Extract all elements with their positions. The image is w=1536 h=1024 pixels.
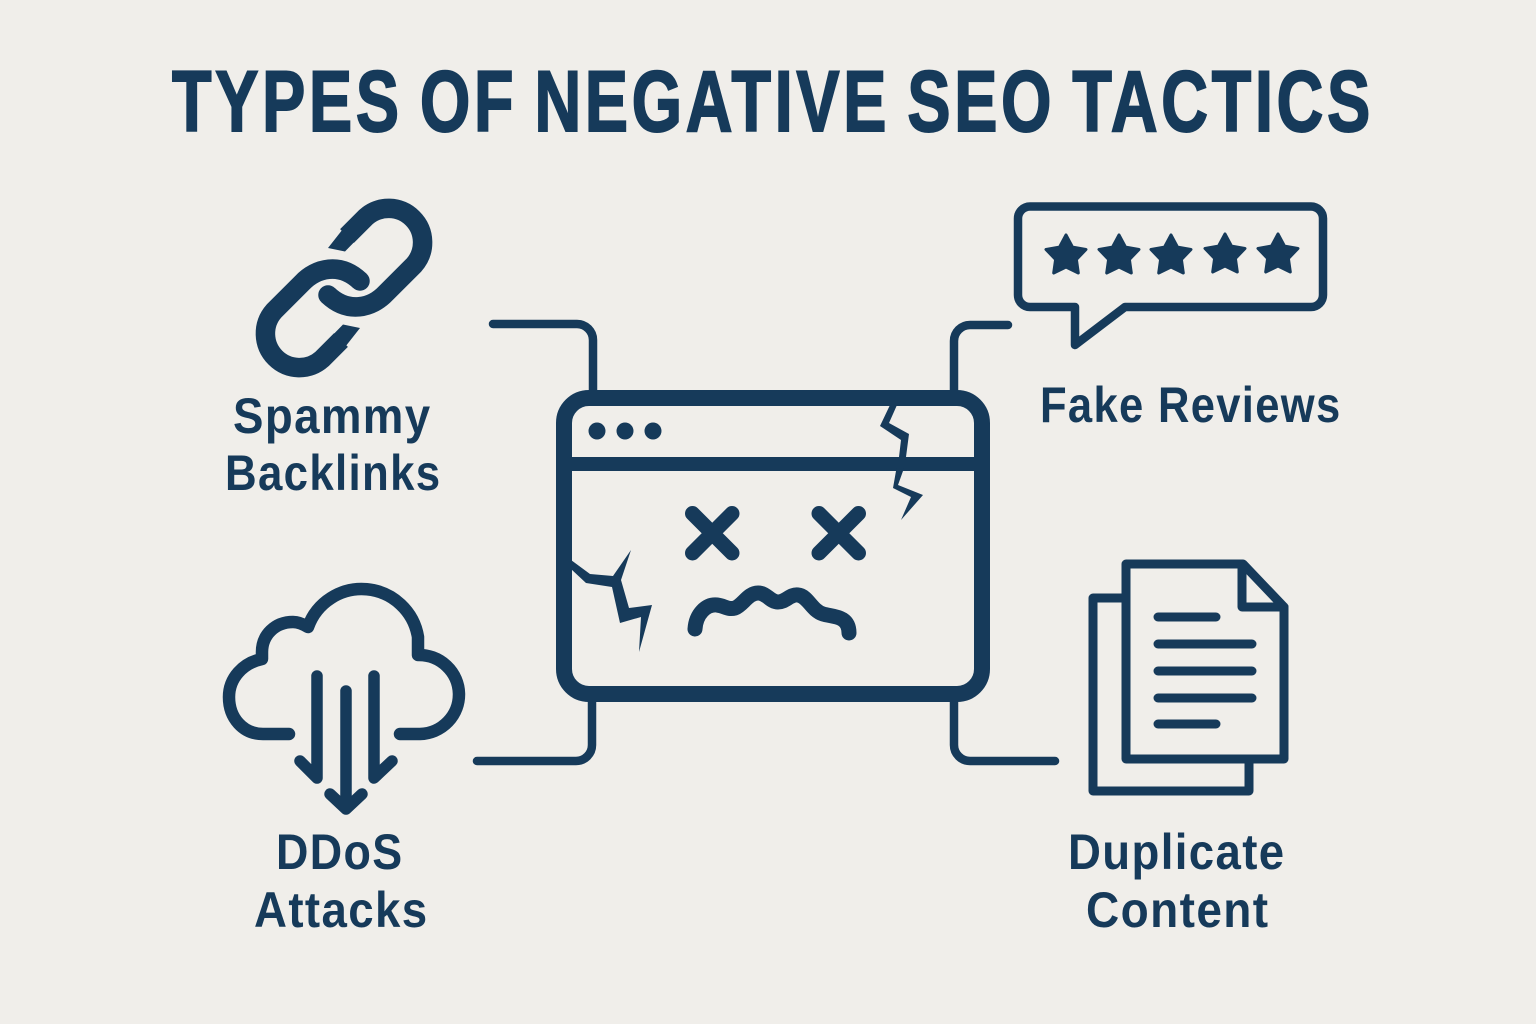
browser dots bbox=[588, 422, 662, 440]
icon: left x eye bbox=[692, 514, 732, 553]
back page bbox=[1093, 598, 1249, 791]
label: ddos attacks: Attacks bbox=[254, 882, 428, 938]
label: duplicate content bbox=[1068, 824, 1286, 938]
connector: fake reviews to browser bbox=[954, 325, 1008, 392]
icon: right x eye bbox=[819, 514, 858, 553]
icon: cloud with down arrows bbox=[229, 589, 459, 809]
label: ddos attacks bbox=[254, 824, 428, 938]
text lines bbox=[1158, 617, 1252, 724]
folded corner bbox=[1242, 564, 1284, 607]
icon: crack left bbox=[571, 550, 652, 652]
front page bbox=[1126, 564, 1284, 759]
panel: broken browser window bbox=[564, 398, 982, 694]
label: fake reviews: Fake Reviews bbox=[1040, 377, 1342, 433]
label: duplicate content: Content bbox=[1086, 882, 1270, 938]
speech bubble outline bbox=[1018, 206, 1323, 345]
cloud outline bbox=[229, 589, 459, 734]
label: duplicate content: Duplicate bbox=[1068, 824, 1286, 880]
down arrows bbox=[300, 676, 392, 809]
five stars bbox=[1046, 234, 1298, 273]
connector: duplicate content to browser bbox=[954, 700, 1055, 761]
icon: crack top right bbox=[880, 405, 923, 520]
label: spammy backlinks: Backlinks bbox=[225, 445, 442, 501]
browser title bar divider bbox=[564, 457, 982, 471]
connector: ddos attacks to browser bbox=[477, 700, 592, 761]
browser frame bbox=[564, 398, 982, 694]
icon: duplicate documents bbox=[1093, 564, 1284, 791]
label: ddos attacks: DDoS bbox=[276, 824, 404, 880]
label: spammy backlinks bbox=[225, 388, 442, 501]
icon: wavy frown bbox=[695, 593, 849, 633]
icon: review speech bubble bbox=[1018, 206, 1323, 345]
icon: chain link bbox=[265, 208, 423, 368]
label: spammy backlinks: Spammy bbox=[233, 388, 432, 444]
connector: spammy backlinks to browser bbox=[493, 324, 593, 392]
